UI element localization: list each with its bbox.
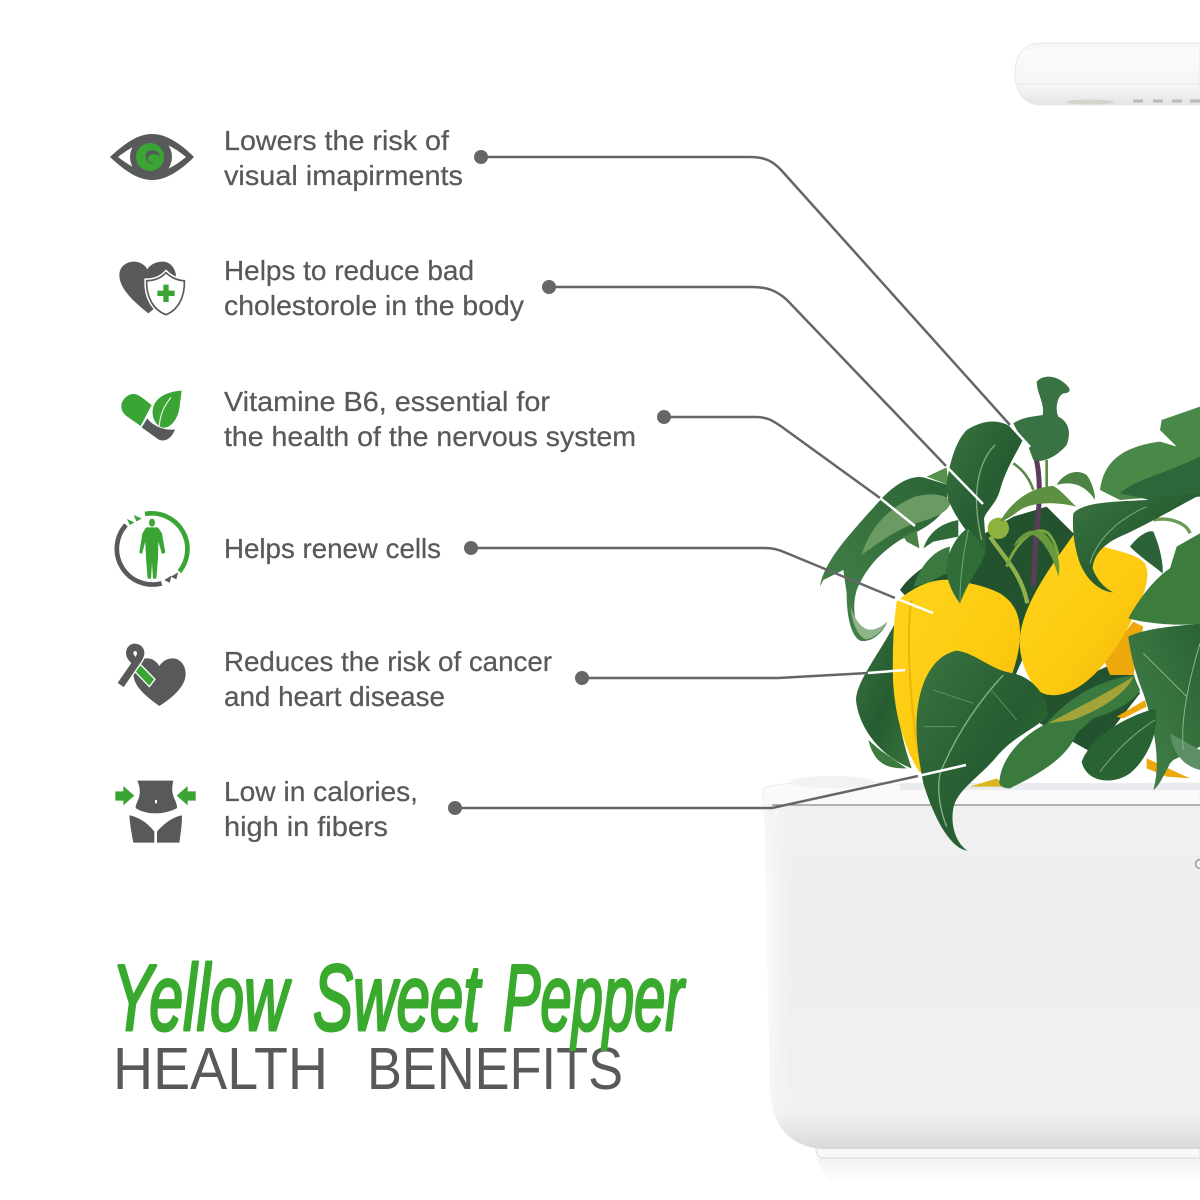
lamp hood [1015,43,1200,105]
benefit text 1: Lowers the risk of [224,125,449,156]
title script: yellow sweet pepper: Yellow [112,945,291,1050]
benefit text 6 [224,776,418,842]
benefit text 4: Helps renew cells [224,533,441,564]
central upper leaf [947,421,1023,553]
benefit text 3 [224,386,636,452]
title [112,945,686,1102]
leader line 2 [542,280,983,504]
title script: yellow sweet pepper: Pepper [503,945,686,1050]
icon: capsule and leaf [121,391,182,440]
leaf over right pepper [1073,495,1200,592]
benefit text 2 [224,255,524,321]
small low leaf [868,740,907,768]
lower middle leaf [999,675,1140,788]
stem leaf arch [1013,530,1059,577]
benefit text 2: Helps to reduce bad [224,255,474,286]
planter pot [763,776,1200,1185]
leader line 1 [474,150,1030,447]
leader line 4 [464,541,933,613]
subtitle: health benefits: BENEFITS [367,1036,623,1102]
subtitle: health benefits [113,1036,623,1102]
mid leaf [947,528,985,603]
benefit text 6: high in fibers [224,811,388,842]
stem leaves [1000,486,1077,522]
title script: yellow sweet pepper [112,945,686,1050]
icon: waist with arrows [115,781,196,843]
right top leaves [1100,407,1200,500]
right leaves [1128,533,1200,790]
leader line 5 [575,670,905,685]
title script: yellow sweet pepper: Sweet [313,945,482,1050]
benefit text 1 [224,125,463,191]
benefit text 3: the health of the nervous system [224,421,636,452]
benefit text 6: Low in calories, [224,776,418,807]
top leaf cluster [1013,377,1070,461]
big front leaf [917,651,1047,851]
icon: ribbon and heart [121,647,186,706]
pepper left fold [909,600,918,753]
pepper left [893,580,1020,773]
icon: body cycle [117,513,187,585]
stems and dark foliage mass [900,450,1190,787]
leader line 3 [657,410,915,526]
benefit text 1: visual imapirments [224,160,463,191]
left back leaf [856,620,912,768]
benefit text 5: Reduces the risk of cancer [224,646,552,677]
pepper right [1020,535,1147,695]
benefit text 2: cholestorole in the body [224,290,524,321]
icon: heart with shield [119,262,184,315]
upper left drooping leaves [820,467,951,641]
benefit text 5: and heart disease [224,681,445,712]
pepper behind right [1104,622,1190,778]
benefit text 3: Vitamine B6, essential for [224,386,550,417]
icon: eye [110,134,194,180]
pepper plant [820,377,1200,851]
leader line 6 [448,765,966,815]
lower right leaf [1082,708,1156,781]
benefit text 5 [224,646,552,712]
subtitle: health benefits: HEALTH [113,1036,328,1102]
